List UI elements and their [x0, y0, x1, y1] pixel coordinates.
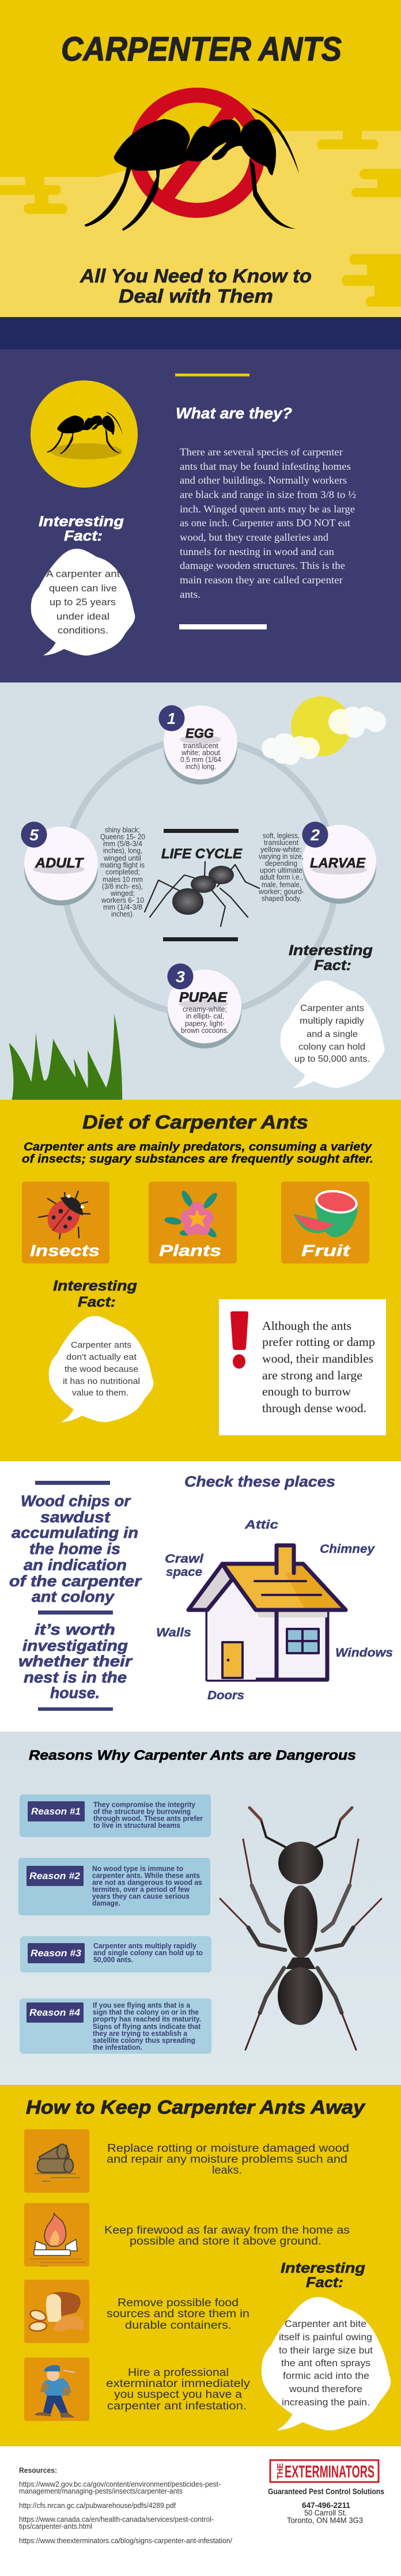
callout: bite fact: wound therefore [289, 2384, 362, 2394]
step 2: larvae: LARVAE [310, 855, 366, 871]
text block: description: There are several species of carpenter [180, 446, 343, 458]
step 1: egg: 0.5 mm (1/64 [180, 755, 221, 764]
card: reason 2: termites, over a period of few [92, 1885, 190, 1894]
step 5: adult: Queens 15- 20 [100, 832, 145, 841]
callout: bite fact: Carpenter ant bite [285, 2319, 366, 2329]
step 2: larvae: yellow-white; [260, 845, 302, 854]
card: reason 2: No wood type is immune to [92, 1865, 183, 1873]
heading: check these places: Check these places [184, 1473, 335, 1490]
icon: bread and croissant [29, 2292, 84, 2332]
callout: wood fact: Carpenter ants [71, 1341, 131, 1350]
card: reason 2: years they can cause serious [92, 1892, 190, 1900]
labels: house places: Attic [244, 1518, 278, 1532]
text block: contact: Guaranteed Pest Control Solutions [268, 2487, 384, 2496]
step 2: larvae: depending [265, 859, 297, 868]
step 2: larvae: worker; gourd- [258, 887, 304, 896]
callout: mandibles card: are strong and large [262, 1368, 362, 1382]
text block: wood chips warning: it’s worth [35, 1621, 115, 1638]
text block: resources: management/managing-pests/insects/carpenter-ants [19, 2487, 183, 2495]
heading: interesting fact: Interesting [289, 942, 373, 959]
panel: diet [0, 1100, 401, 1461]
step 5: adult: mm (1/4-3/8 [103, 903, 142, 911]
card: reason 4: they are trying to establish a [93, 2030, 188, 2038]
callout: bite fact: itself is painful owing [279, 2332, 372, 2343]
tip 1: rotting wood: and repair any moisture problems such and [107, 2153, 347, 2166]
subtitle [80, 265, 312, 307]
callout: queen fact: conditions. [58, 625, 108, 636]
text block: description: inch. Winged queen ants may be as large [180, 503, 355, 515]
card: insects [22, 1182, 109, 1264]
text block: diet intro: Carpenter ants are mainly predators, consuming a variety [24, 1141, 372, 1153]
text block: contact: 50 Carroll St. [304, 2508, 347, 2517]
step 5: adult: ADULT [35, 855, 84, 871]
text block: wood chips warning: nest is in the [24, 1669, 127, 1686]
step 5: adult: winged until [103, 854, 141, 862]
card: reason 4: the infestation. [93, 2043, 142, 2051]
callout: colony fact: multiply rapidly [300, 1016, 364, 1026]
tip 1: rotting wood [24, 2129, 349, 2193]
icon: exterminator man [35, 2365, 75, 2417]
callout: bite fact: formic acid into the [283, 2371, 369, 2381]
icon: logs [35, 2144, 80, 2181]
icon: ant in yellow circle [31, 380, 138, 488]
text block: wood chips warning: whether their [18, 1653, 133, 1670]
labels: house places [156, 1518, 393, 1702]
text block: resources: tips/carpenter-ants.html [19, 2522, 92, 2530]
card: reason 1: Reason #1 [31, 1806, 81, 1817]
step 2: larvae: 2 [310, 826, 320, 844]
step 3: pupae: in ellipti- cal, [186, 1012, 224, 1020]
step 5: adult: 5 [29, 826, 39, 844]
callout: colony fact [281, 980, 384, 1088]
step 3: pupae: PUPAE [179, 990, 228, 1005]
card: reason 1: of the structure by burrowing [93, 1808, 191, 1816]
heading: interesting fact: Interesting [39, 514, 124, 530]
heading: interesting fact [289, 942, 373, 974]
callout: colony fact: and a single [307, 1029, 358, 1039]
step 2: larvae [258, 822, 376, 904]
callout: bite fact: to their large size but [279, 2345, 373, 2356]
logo: the exterminators: THE [275, 2463, 285, 2479]
heading: interesting fact: Fact: [306, 2275, 343, 2291]
step 5: adult: completed; [105, 868, 140, 876]
text block: wood chips warning [9, 1481, 142, 1711]
labels: house places: Chimney [320, 1542, 375, 1556]
callout: mandibles card: through dense wood. [262, 1401, 366, 1415]
step 1: egg: translucent [183, 741, 218, 750]
step 5: adult: shiny black; [105, 825, 140, 834]
center: life cycle title [161, 829, 243, 941]
text block: wood chips warning: of the carpenter [9, 1572, 142, 1590]
text block: resources [19, 2466, 233, 2545]
text block: wood chips warning: house. [50, 1684, 100, 1702]
text block: diet intro: of insects; sugary substances are frequently sought after. [22, 1153, 373, 1166]
callout: queen fact [31, 549, 135, 655]
step 3: pupae: brown cocoons. [181, 1026, 229, 1035]
callout: mandibles card: Although the ants [262, 1319, 351, 1333]
text block: description: wood, but they create galleries and [180, 531, 328, 543]
step 2: larvae: upon ultimate [260, 866, 302, 874]
subtitle: All You Need to Know to [80, 265, 312, 286]
card: reason 3: 50,000 ants. [93, 1956, 133, 1964]
text block: diet intro [22, 1141, 373, 1166]
labels: house places: Crawl [165, 1552, 204, 1566]
tip 4: exterminator [24, 2358, 251, 2421]
text block: description: ants that may be found infesting homes [180, 461, 351, 472]
card: reason 4: sign that the colony on or in the [93, 2008, 199, 2016]
step 5: adult: inches), long, [103, 846, 142, 855]
step 2: larvae: adult form i.e., [260, 873, 303, 881]
text block: description: are black and range in size from 3/8 to ½ [180, 489, 356, 500]
tip 3: food: sources and store them in [107, 2308, 249, 2320]
card: reason 3: and single colony can hold up to [93, 1949, 203, 1957]
text block: wood chips warning: accumulating in [12, 1524, 138, 1541]
card: insects: Insects [30, 1242, 100, 1259]
text block: description: as one inch. Carpenter ants DO NOT eat [180, 517, 350, 529]
card: reason 1: to live in structural beams [93, 1821, 180, 1830]
heading: reasons: Reasons Why Carpenter Ants are Dangerous [29, 1748, 356, 1763]
panel: prevention [0, 2085, 401, 2446]
step 1: egg: white; about [181, 748, 220, 757]
callout: wood fact: value to them. [72, 1389, 128, 1398]
card: reason 2: damage. [92, 1899, 120, 1907]
text block: wood chips warning: sawdust [40, 1508, 111, 1526]
card: reason 4: If you see flying ants that is a [93, 2001, 191, 2009]
text block: wood chips warning: the home is [29, 1540, 120, 1557]
heading: interesting fact: Fact: [314, 957, 351, 974]
icon: fire [30, 2213, 85, 2266]
card: plants: Plants [159, 1242, 221, 1259]
step 1: egg: inch) long. [186, 762, 216, 771]
heading: interesting fact: Interesting [53, 1278, 137, 1294]
callout: queen fact: under ideal [56, 611, 109, 622]
card: reason 3 [20, 1936, 211, 1972]
text block: wood chips warning: Wood chips or [21, 1492, 131, 1510]
heading: interesting fact: Fact: [64, 528, 103, 544]
labels: house places: Doors [207, 1689, 244, 1702]
card: reason 2 [18, 1858, 210, 1915]
callout: wood fact: the wood because [65, 1365, 138, 1374]
tip 1: rotting wood: Replace rotting or moisture damaged wood [107, 2143, 349, 2155]
callout: bite fact: the ant often sprays [281, 2358, 370, 2368]
callout: mandibles card: wood, their mandibles [262, 1352, 373, 1366]
step 5: adult: mm (5/8-3/4 [103, 839, 142, 848]
text block: wood chips warning: an indication [24, 1556, 127, 1574]
card: fruit [281, 1182, 369, 1264]
tip 4: exterminator: Hire a professional [128, 2367, 229, 2379]
step 3: pupae: 3 [176, 968, 185, 986]
icon: ladybug [41, 1190, 89, 1240]
heading: interesting fact: Interesting [281, 2260, 365, 2276]
panel: hero [0, 0, 401, 317]
heading: interesting fact: Fact: [78, 1294, 116, 1310]
callout: mandibles card [219, 1299, 386, 1435]
callout: mandibles card: enough to burrow [262, 1385, 351, 1398]
illustration: large ant [220, 1808, 381, 2050]
tip 2: firewood: Keep firewood as far away from the home as [104, 2224, 350, 2236]
heading: interesting fact [39, 514, 124, 544]
step 5: adult [21, 822, 145, 918]
card: reason 4: satellite colony thus spreading [93, 2036, 195, 2045]
card: reason 3: Reason #3 [31, 1948, 82, 1959]
callout: queen fact: up to 25 years [50, 597, 116, 608]
tip 2: firewood [24, 2203, 350, 2266]
step 5: adult: (3/8 inch- es), [102, 882, 143, 891]
text block: wood chips warning: ant colony [32, 1588, 115, 1605]
callout: bite fact [262, 2297, 391, 2430]
callout: queen fact: A carpenter ant [46, 568, 120, 579]
panel: footer [0, 2446, 401, 2576]
icon: flower [164, 1189, 220, 1239]
heading: interesting fact [53, 1278, 137, 1310]
tip 3: food [24, 2280, 249, 2343]
tip 3: food: Remove possible food [118, 2297, 239, 2309]
step 2: larvae: male, female, [262, 880, 301, 889]
labels: house places: Walls [156, 1626, 191, 1639]
tip 2: firewood: possible and store it above ground. [130, 2235, 321, 2247]
icon: watermelon [294, 1187, 359, 1237]
center: life cycle title: LIFE CYCLE [161, 846, 243, 862]
tip 4: exterminator: you suspect you have a [114, 2389, 242, 2401]
card: plants [149, 1182, 237, 1264]
icon: ant photo [145, 862, 259, 926]
text block: description [180, 446, 356, 600]
text block: resources: Resources: [19, 2466, 57, 2475]
text block: resources: http://cfs.nrcan.gc.ca/pubwarehouse/pdfs/4289.pdf [19, 2502, 176, 2510]
title: CARPENTER ANTS [61, 31, 342, 68]
step 3: pupae: papery, light- [185, 1019, 225, 1028]
logo: the exterminators [270, 2460, 379, 2482]
text block: description: and other buildings. Normally workers [180, 474, 347, 486]
heading: diet: Diet of Carpenter Ants [82, 1111, 308, 1133]
card: reason 4: Signs of flying ants indicate that [93, 2023, 201, 2031]
icon: house [188, 1545, 346, 1680]
callout: wood fact: don't actually eat [66, 1353, 137, 1362]
panel: what are they [0, 317, 401, 682]
step 2: larvae: shaped body. [262, 894, 301, 903]
text block: contact: Toronto, ON M4M 3G3 [287, 2515, 363, 2525]
panel: check these places [0, 1461, 401, 1732]
heading: interesting fact [281, 2260, 365, 2291]
text block: description: damage wooden structures. This is the [180, 560, 345, 571]
card: fruit: Fruit [301, 1242, 351, 1259]
tip 4: exterminator: carpenter ant infestation. [107, 2400, 247, 2412]
icon: grass [9, 1014, 122, 1100]
card: reason 1: They compromise the integrity [93, 1801, 195, 1809]
text block: wood chips warning: investigating [22, 1637, 128, 1654]
text block: resources: https://www.theexterminators.ca/blog/signs-carpenter-ant-infestation/ [19, 2537, 233, 2545]
callout: wood fact [49, 1316, 153, 1422]
heading: prevention: How to Keep Carpenter Ants Away [26, 2096, 366, 2118]
card: reason 2: are not as dangerous to wood as [92, 1879, 202, 1887]
text block: description: tunnels for nesting in wood and can [180, 546, 334, 557]
card: reason 2: carpenter ants. While these ants [92, 1872, 200, 1880]
icon: sun and clouds [262, 696, 386, 765]
heading: what are they: What are they? [176, 405, 292, 422]
step 1: egg: 1 [167, 710, 176, 727]
step 5: adult: mating flight is [100, 861, 145, 869]
step 2: larvae: varying in size, [259, 852, 304, 861]
step 1: egg [159, 706, 237, 785]
step 2: larvae: translucent [264, 838, 298, 847]
callout: colony fact: colony can hold [298, 1042, 365, 1052]
callout: colony fact: up to 50,000 ants. [294, 1054, 370, 1064]
callout: queen fact: queen can live [49, 583, 117, 594]
card: reason 4: proprty has reached its maturity. [93, 2015, 201, 2023]
text block: contact: 647-496-2211 [302, 2500, 350, 2510]
subtitle: Deal with Them [119, 285, 273, 307]
card: reason 3: Carpenter ants multiply rapidly [93, 1942, 196, 1950]
text block: resources: https://www2.gov.bc.ca/gov/content/environment/pesticides-pest- [19, 2480, 221, 2488]
icon: prohibition sign [137, 95, 258, 210]
card: reason 1 [20, 1794, 211, 1837]
card: reason 4 [20, 1998, 211, 2054]
callout: bite fact: increasing the pain. [282, 2397, 370, 2408]
text block: description: main reason they are called carpenter [180, 574, 343, 586]
labels: house places: space [166, 1566, 202, 1579]
step 5: adult: males 10 mm [103, 875, 143, 884]
icon: ant silhouette [85, 108, 299, 231]
tip 1: rotting wood: leaks. [212, 2164, 242, 2177]
step 2: larvae: soft, legless, [263, 831, 300, 840]
card: reason 1: through wood. These ants prefer [93, 1815, 203, 1823]
icon: exclamation mark [230, 1311, 248, 1368]
text block: contact [268, 2487, 384, 2525]
tip 3: food: durable containers. [125, 2319, 232, 2332]
tip 4: exterminator: exterminator immediately [106, 2378, 251, 2390]
step 3: pupae: creamy-white; [183, 1005, 227, 1013]
callout: colony fact: Carpenter ants [300, 1004, 364, 1013]
step 5: adult: winged; [110, 889, 135, 897]
labels: house places: Windows [335, 1646, 393, 1659]
panel: life cycle [0, 682, 401, 1100]
card: reason 4: Reason #4 [29, 2007, 81, 2018]
panel: reasons [0, 1732, 401, 2085]
callout: wood fact: it has no nutritional [63, 1377, 140, 1386]
callout: mandibles card: prefer rotting or damp [262, 1335, 375, 1349]
step 1: egg: EGG [186, 726, 214, 741]
text block: resources: https://www.canada.ca/en/health-canada/services/pest-control- [19, 2515, 214, 2524]
step 3: pupae [167, 964, 241, 1048]
card: reason 2: Reason #2 [29, 1870, 81, 1881]
step 5: adult: workers 6- 10 [101, 896, 144, 904]
text block: description: ants. [180, 589, 200, 600]
step 5: adult: inches). [111, 910, 134, 918]
